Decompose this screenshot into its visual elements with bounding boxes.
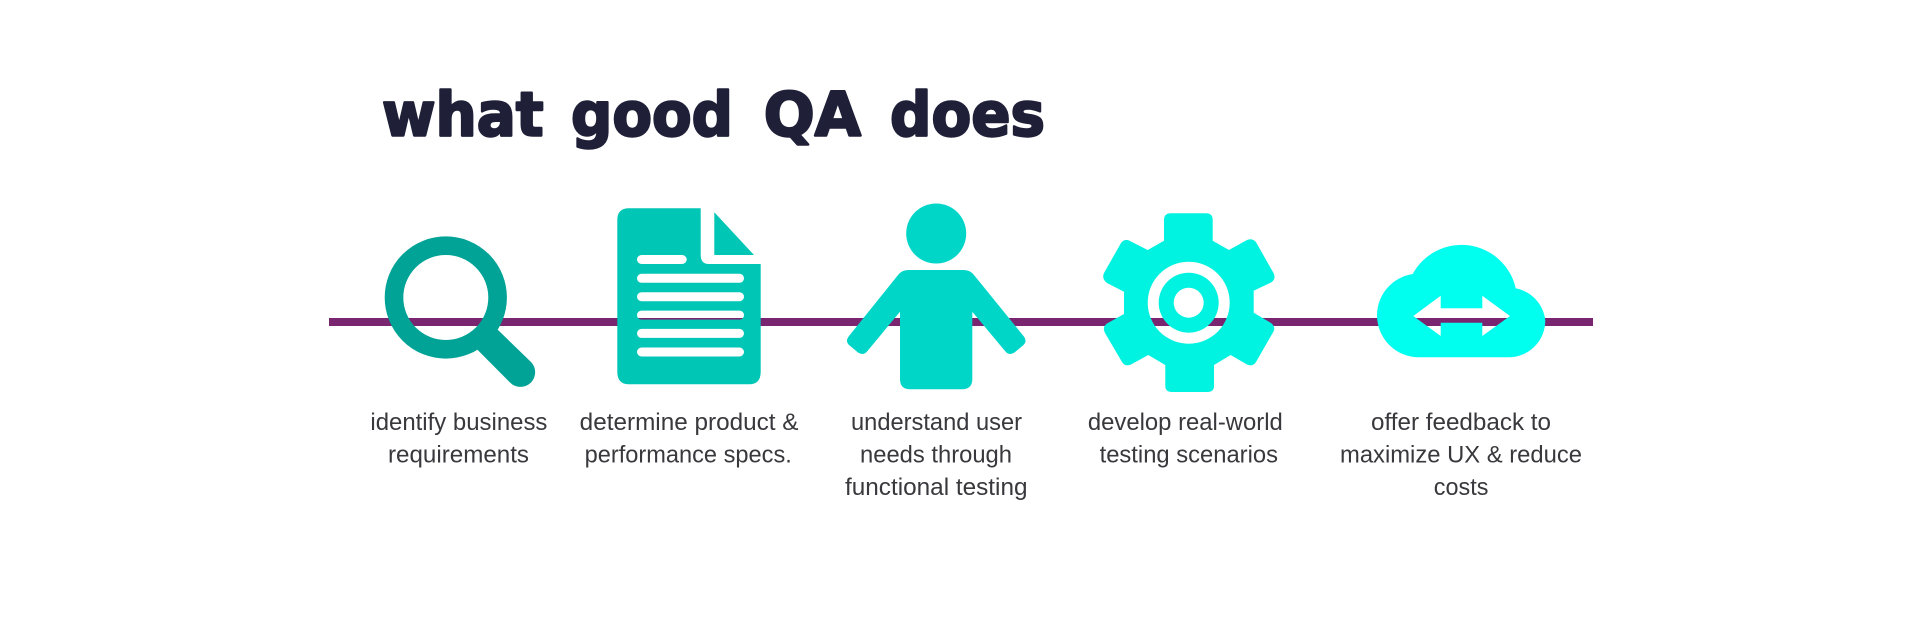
icon: magnifying glass [394,246,535,387]
label: offer feedback to maximize UX and reduce costs [1340,409,1582,501]
title: what [382,80,544,150]
label: develop real-world testing scenarios: testing scenarios [1100,442,1278,468]
label: offer feedback to maximize UX and reduce costs: offer feedback to [1371,409,1551,436]
label: understand user needs through functional testing: understand user [851,409,1022,436]
title: QA [764,80,861,150]
title [382,80,1045,150]
timeline line [329,318,1593,326]
icon: document [617,208,761,384]
label: determine product and performance specs: performance specs. [585,442,792,468]
icon: person [847,204,1026,389]
label: understand user needs through functional testing: functional testing [845,474,1028,501]
label: offer feedback to maximize UX and reduce costs: costs [1434,474,1488,501]
label: develop real-world testing scenarios [1088,409,1283,468]
label: identify business requirements: identify business [370,409,547,436]
label: identify business requirements [370,409,547,468]
title: good [571,80,733,150]
label: understand user needs through functional testing [845,409,1028,501]
label: develop real-world testing scenarios: develop real-world [1088,409,1283,436]
label: identify business requirements: requirements [388,442,529,468]
icon: gear [1103,213,1275,392]
icon: cloud with double arrow [1377,245,1545,357]
label: offer feedback to maximize UX and reduce costs: maximize UX & reduce [1340,442,1582,468]
label: understand user needs through functional testing: needs through [860,442,1012,468]
title: does [890,80,1045,150]
label: determine product and performance specs: determine product & [580,409,798,436]
label: determine product and performance specs [580,409,798,468]
